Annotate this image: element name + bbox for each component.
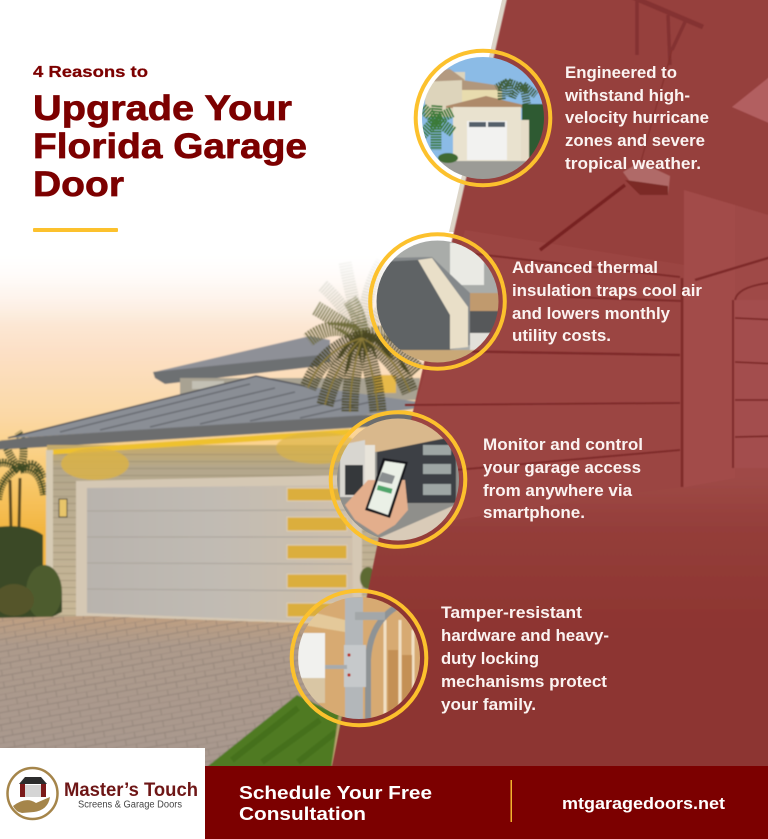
driveway pavers [0, 616, 352, 776]
garage door opener [623, 162, 670, 195]
text: zones and severe [565, 131, 705, 150]
text: hardware and heavy- [441, 626, 609, 645]
top fade of the photo [0, 250, 440, 325]
text: tropical weather. [565, 154, 701, 173]
reason 2: thermal insulation [370, 234, 702, 369]
text: Engineered to [565, 63, 677, 82]
text: insulation traps cool air [512, 281, 702, 300]
footer call-to-action bar [205, 766, 768, 839]
red overlay panel: garage interior [330, 0, 768, 776]
consultation text: Consultation [239, 804, 366, 824]
heading: Florida Garage [33, 126, 307, 166]
garage door panels [400, 253, 768, 487]
text [512, 258, 702, 345]
text: smartphone. [483, 503, 585, 522]
logo icon [8, 768, 58, 819]
reason 3: smartphone control [331, 412, 643, 547]
icon: insulated panel in circle [370, 234, 505, 369]
garage door windows [287, 488, 347, 617]
lower roof [8, 376, 420, 438]
icon: locking hardware in circle [292, 591, 426, 725]
text [564, 63, 709, 173]
text: utility costs. [512, 326, 611, 345]
website: mtgaragedoors.net [562, 795, 726, 813]
left palm trees [0, 432, 44, 530]
ceiling light panel [732, 70, 768, 127]
consultation text: Schedule Your Free [239, 783, 432, 803]
text: Tamper-resistant [441, 603, 582, 622]
logo wordmark: Master’s Touch [64, 780, 198, 801]
text [483, 435, 643, 522]
title block [33, 64, 307, 232]
siding wall [47, 445, 387, 618]
roof fascia [0, 412, 420, 450]
text: your family. [441, 695, 536, 714]
icon: phone in hand in circle [331, 412, 465, 547]
lawn [198, 695, 345, 774]
ceiling rack [630, 0, 703, 65]
text: your garage access [483, 458, 641, 477]
reason 4: tamper-resistant hardware [292, 591, 609, 725]
rear wall and door panels [380, 230, 685, 532]
text: duty locking [441, 649, 539, 668]
opener rail [540, 185, 625, 250]
footer logo panel [0, 748, 205, 839]
corner trim and wall lamp [46, 450, 53, 582]
upper roof [154, 336, 330, 378]
logo wordmark: Screens & Garage Doors [78, 800, 182, 810]
text: from anywhere via [483, 481, 633, 500]
garage door frame [76, 475, 362, 625]
sliver of garage photo along the diagonal [449, 0, 507, 232]
icon: photo of house in circle [416, 51, 550, 185]
heading [33, 88, 307, 204]
text: velocity hurricane [565, 108, 709, 127]
shrubs [0, 526, 62, 618]
text: Advanced thermal [512, 258, 658, 277]
heading: Door [33, 164, 124, 204]
reason 1: hurricane rated [416, 51, 709, 185]
text: Monitor and control [483, 435, 643, 454]
text: mechanisms protect [441, 672, 607, 691]
epoxy floor [330, 476, 768, 776]
consultation text [239, 783, 432, 824]
photo: house at sunset [0, 250, 440, 776]
text: withstand high- [564, 86, 690, 105]
divider [510, 780, 512, 822]
text [441, 603, 609, 714]
heading: Upgrade Your [33, 88, 292, 128]
palm fronds [308, 262, 418, 412]
accent bar [33, 228, 118, 232]
text: and lowers monthly [512, 304, 671, 323]
logo wordmark [64, 780, 198, 810]
garage door [87, 485, 353, 623]
kicker: 4 Reasons to [33, 64, 148, 81]
side wall and column [684, 190, 735, 488]
